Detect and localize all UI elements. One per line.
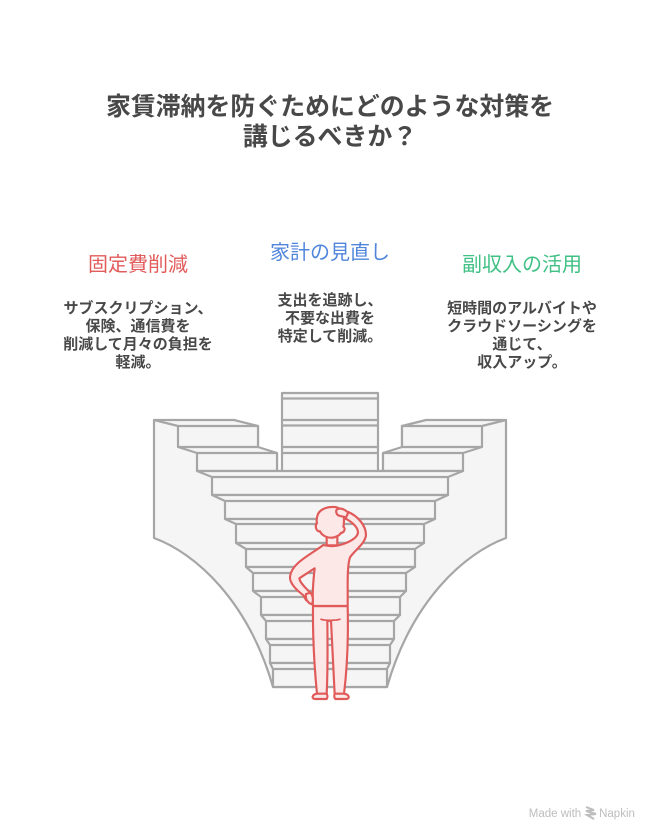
person scratching head xyxy=(290,507,366,699)
heading: household budget review: 家計の見直し xyxy=(270,241,390,264)
text block: side income: クラウドソーシングを xyxy=(447,317,597,335)
panel: side income xyxy=(447,253,597,371)
left foot xyxy=(313,694,327,699)
staircase illustration xyxy=(154,393,506,687)
text block: household budget review xyxy=(277,291,383,345)
left hand xyxy=(306,593,313,604)
text block: household budget review: 特定して削減。 xyxy=(278,327,382,345)
watermark: Made with Napkin: Made with xyxy=(529,808,581,820)
right upper steps xyxy=(383,420,506,471)
central tower xyxy=(282,393,378,473)
text block: household budget review: 支出を追跡し、 xyxy=(277,291,383,309)
text block: fixed cost reduction xyxy=(63,299,213,371)
watermark: Made with Napkin: Napkin xyxy=(599,808,635,820)
belt detail xyxy=(321,619,340,620)
text block: fixed cost reduction: 保険、通信費を xyxy=(85,317,191,335)
panel: fixed cost reduction xyxy=(63,253,213,371)
title: 講じるべきか？ xyxy=(243,123,417,151)
text block: fixed cost reduction: 削減して月々の負担を xyxy=(63,335,213,353)
text block: side income: 収入アップ。 xyxy=(477,354,567,371)
text block: side income: 通じて、 xyxy=(492,336,552,353)
right foot xyxy=(334,694,349,699)
torso and arms xyxy=(290,512,366,606)
right hand xyxy=(336,509,348,517)
title xyxy=(106,93,554,151)
text block: side income: 短時間のアルバイトや xyxy=(447,299,597,317)
neck xyxy=(327,536,337,545)
text block: fixed cost reduction: サブスクリプション、 xyxy=(63,299,213,317)
watermark: Made with Napkin xyxy=(529,807,635,820)
head xyxy=(316,507,345,538)
text block: fixed cost reduction: 軽減。 xyxy=(115,353,161,371)
left upper steps xyxy=(154,420,277,471)
text block: side income xyxy=(447,299,597,371)
funnel body xyxy=(154,420,506,687)
title: 家賃滞納を防ぐためにどのような対策を xyxy=(106,93,554,121)
panel: household budget review xyxy=(270,241,390,345)
icon: Napkin logo xyxy=(586,807,596,819)
heading: side income: 副収入の活用 xyxy=(462,253,582,276)
heading: fixed cost reduction: 固定費削減 xyxy=(88,253,188,276)
legs xyxy=(313,606,348,694)
stair steps xyxy=(197,471,463,687)
text block: household budget review: 不要な出費を xyxy=(285,309,375,327)
